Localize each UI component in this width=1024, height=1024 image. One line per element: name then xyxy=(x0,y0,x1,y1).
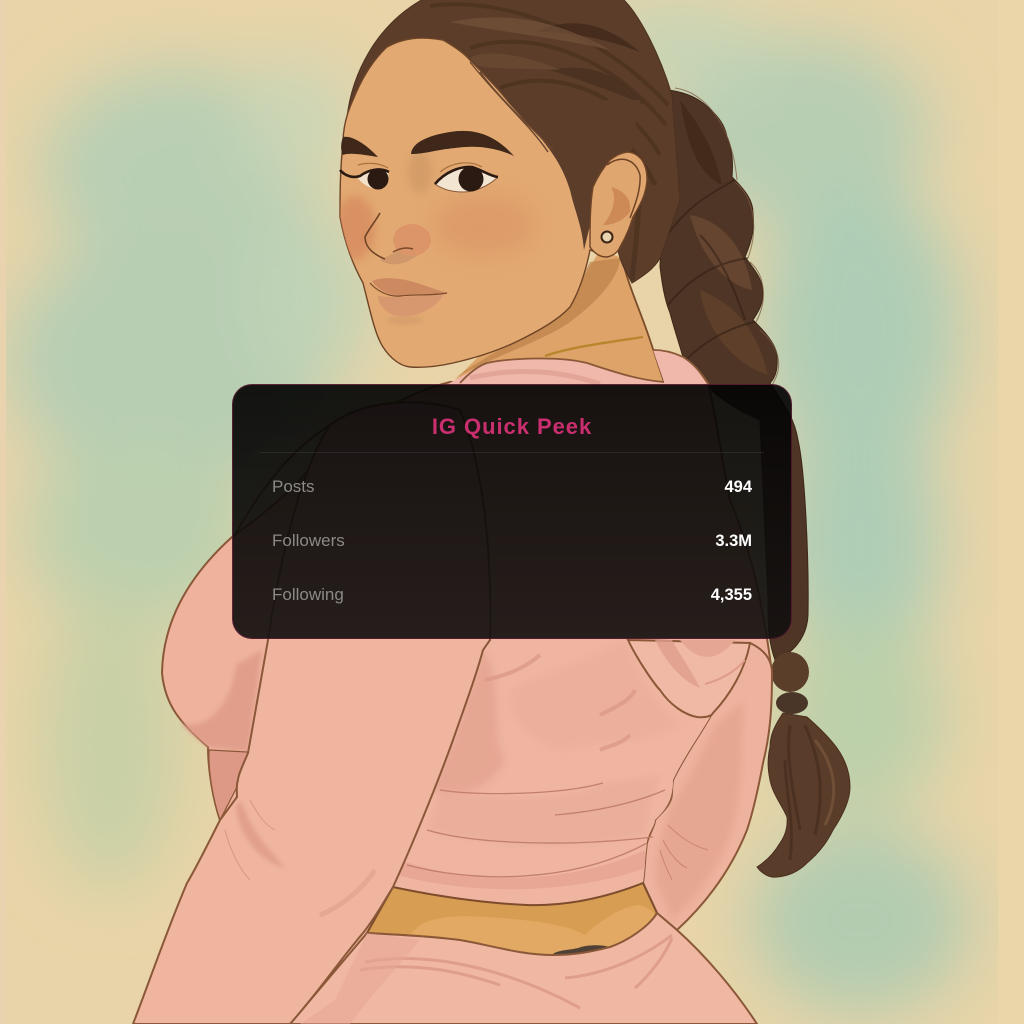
stats card: IG Quick Peek xyxy=(232,384,792,639)
left eye xyxy=(340,163,389,190)
near arm xyxy=(133,402,490,1024)
necklace xyxy=(545,337,643,356)
hair band xyxy=(776,692,808,714)
braid tail xyxy=(757,692,850,877)
right eye xyxy=(435,163,498,192)
stat row: followers xyxy=(272,531,752,550)
torso top xyxy=(393,640,710,905)
earring xyxy=(602,232,612,242)
stat row: following xyxy=(272,585,752,604)
stat row: following: 4,355 xyxy=(711,586,752,604)
hair xyxy=(347,0,680,283)
pants xyxy=(290,913,757,1024)
neck xyxy=(455,250,664,382)
far sleeve xyxy=(643,643,772,930)
waist tattoo xyxy=(553,945,610,955)
lower braid lobe xyxy=(771,652,809,692)
face shading xyxy=(335,150,533,325)
stat row: followers: 3.3M xyxy=(715,532,752,550)
stat row: followers: Followers xyxy=(272,531,345,550)
shoulder outline under the card xyxy=(235,402,460,535)
stat row: following: Following xyxy=(272,585,344,604)
braid xyxy=(640,88,809,692)
lips xyxy=(370,278,447,316)
hair over temple xyxy=(507,100,640,250)
stat row: posts xyxy=(272,477,752,496)
upper body under the card xyxy=(162,350,772,1000)
face xyxy=(335,38,647,367)
left eyebrow xyxy=(341,137,378,157)
torso wrinkles xyxy=(398,640,680,889)
right eyebrow xyxy=(411,131,514,156)
card title: IG Quick Peek xyxy=(432,414,592,439)
chest shading xyxy=(180,650,262,752)
nose xyxy=(365,213,431,264)
hood drape xyxy=(628,640,750,717)
stat row: posts: Posts xyxy=(272,477,315,496)
midriff xyxy=(367,883,657,955)
ear xyxy=(590,152,647,257)
hoodie collar xyxy=(448,350,708,384)
far sleeve shading xyxy=(655,700,745,920)
stat row: posts: 494 xyxy=(724,478,752,496)
